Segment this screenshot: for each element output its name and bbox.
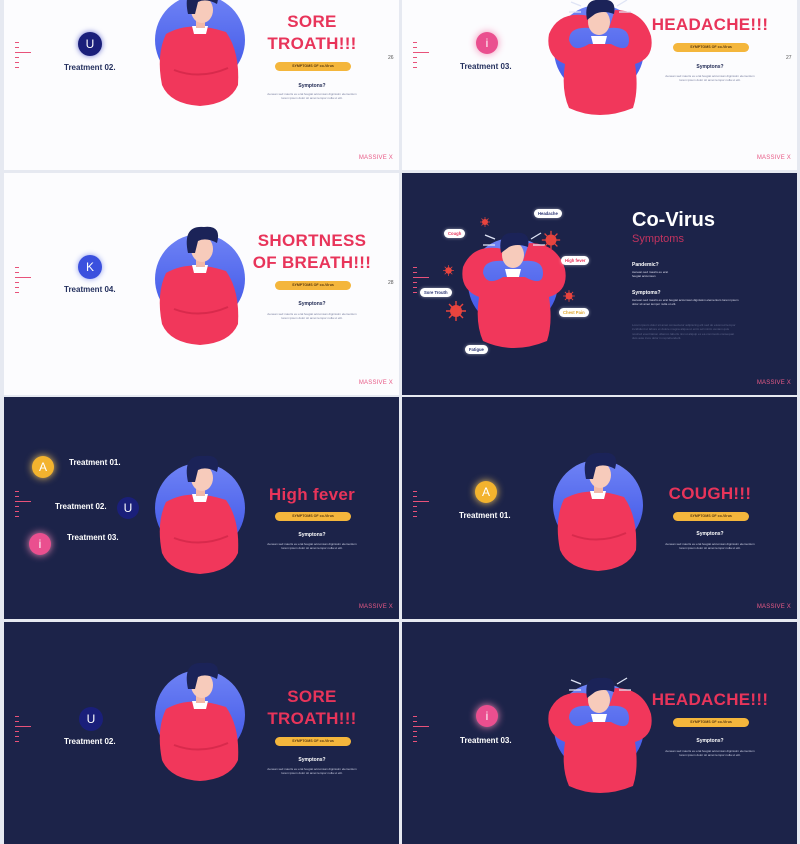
body text: Aenean sed mauris eu erat feugiat accumsan dignissim elementum lorem ipsum dolor sit amet tempor nulla ut elit. [267, 312, 357, 320]
slide: sore throat (light) [4, 0, 399, 170]
slide: headache (light) [402, 0, 797, 170]
label chest pain [559, 308, 589, 317]
nav [15, 42, 31, 68]
person illustration [548, 678, 652, 793]
label fatigue: Fatigue [469, 347, 484, 352]
person illustration [155, 663, 245, 781]
footer: MASSIVE X [757, 380, 791, 386]
treatment icon A: A [482, 485, 490, 499]
pill: SYMPTOMS OF co-Virus [690, 720, 732, 724]
title: HEADACHE!!! [652, 15, 768, 34]
footer: MASSIVE X [359, 155, 393, 161]
question: Symptons? [298, 83, 326, 89]
nav [413, 42, 429, 68]
treatment text: Treatment 03. [460, 736, 512, 745]
treatment text: Treatment 04. [64, 285, 116, 294]
pill [275, 737, 351, 746]
symptoms block: Aenean sed mauris eu erat feugiat accumsan dignissim elementum lorem ipsum dolor sit amet tempor nulla ut elit. [632, 298, 739, 306]
question: Symptons? [696, 531, 724, 537]
pill: SYMPTOMS OF co-Virus [292, 739, 334, 743]
slide: high fever (dark) [4, 397, 399, 619]
nav [15, 267, 31, 293]
title [267, 687, 357, 728]
subheading: Symptoms [632, 233, 684, 245]
nav [413, 716, 429, 742]
label fatigue [465, 345, 488, 354]
title: TROATH!!! [267, 709, 357, 728]
person illustration [462, 232, 566, 348]
question: Symptons? [696, 738, 724, 744]
symptoms block [632, 290, 739, 306]
treatment icon A: A [39, 460, 47, 474]
title [267, 12, 357, 53]
heading: Co-Virus [632, 209, 715, 231]
pill [673, 43, 749, 52]
person illustration [155, 0, 245, 106]
label cough [444, 229, 465, 238]
label high fever: High fever [565, 258, 585, 263]
footer: MASSIVE X [359, 604, 393, 610]
treatment icon U [79, 707, 103, 731]
viruses [443, 217, 575, 321]
treatment icon U: U [86, 37, 94, 51]
nav [413, 491, 429, 517]
label headache [534, 209, 562, 218]
footer: MASSIVE X [757, 604, 791, 610]
pill [275, 62, 351, 71]
pandemic block: Aenean sed mauris eu erat [632, 270, 668, 274]
body text: Aenean sed mauris eu erat feugiat accumsan dignissim elementum lorem ipsum dolor sit amet tempor nulla ut elit. [665, 74, 755, 82]
treatment text: Treatment 02. [64, 737, 116, 746]
treatment 03 text: Treatment 03. [67, 533, 119, 542]
pill [275, 281, 351, 290]
nav [15, 491, 31, 517]
label high fever [561, 256, 589, 265]
label cough: Cough [448, 231, 461, 236]
nav [413, 267, 429, 293]
question: Symptons? [298, 301, 326, 307]
treatment icon i [476, 705, 498, 727]
treatment icon A [475, 481, 497, 503]
pandemic block: feugiat accumsan [632, 274, 656, 278]
person illustration [548, 0, 652, 115]
footer: MASSIVE X [359, 380, 393, 386]
body text: Aenean sed mauris eu erat feugiat accumsan dignissim elementum lorem ipsum dolor sit amet tempor nulla ut elit. [267, 767, 357, 775]
person illustration [155, 226, 245, 345]
body text: Aenean sed mauris eu erat feugiat accumsan dignissim elementum lorem ipsum dolor sit amet tempor nulla ut elit. [267, 542, 357, 550]
treatment icon i: i [486, 709, 488, 723]
label headache: Headache [538, 211, 558, 216]
nav [15, 716, 31, 742]
slide: shortness of breath (light) [4, 173, 399, 395]
title: TROATH!!! [267, 34, 357, 53]
treatment 02 text: Treatment 02. [55, 502, 107, 511]
person illustration [553, 453, 643, 571]
treatment icon i [29, 533, 51, 555]
title: SORE [287, 687, 337, 706]
slide: sore throat (dark) [4, 622, 399, 844]
pandemic block [632, 262, 668, 278]
treatment text: Treatment 01. [459, 511, 511, 520]
treatment icon K: K [86, 260, 94, 274]
question: Symptons? [298, 757, 326, 763]
title: OF BREATH!!! [253, 253, 371, 272]
treatment icon U: U [124, 501, 132, 515]
treatment 01 text: Treatment 01. [69, 458, 121, 467]
symptoms block: Symptoms? [632, 290, 661, 296]
label chest pain: Chest Pain [563, 310, 585, 315]
treatment icon U [78, 32, 102, 56]
question: Symptons? [298, 532, 326, 538]
label sore trouth: Sore Trouth [424, 290, 448, 295]
pill [673, 512, 749, 521]
body text: Aenean sed mauris eu erat feugiat accumsan dignissim elementum lorem ipsum dolor sit amet tempor nulla ut elit. [665, 542, 755, 550]
question: Symptons? [696, 64, 724, 70]
pandemic block: Pandemic? [632, 262, 659, 268]
slide: cough (dark) [402, 397, 797, 619]
paragraph: Lorem ipsum dolor sit amet consectetur adipiscing elit sed do eiusmod tempor incididunt ut labore et dolore magna aliqua ut enim ad minim veniam quis nostrud exercitation ullamco laboris nisi ut aliquip ex ea commodo consequat duis aute irure dolor in reprehenderit. [632, 323, 736, 340]
pill [275, 512, 351, 521]
person illustration [155, 456, 245, 574]
pill: SYMPTOMS OF co-Virus [690, 514, 732, 518]
title [253, 231, 371, 272]
body text: Aenean sed mauris eu erat feugiat accumsan dignissim elementum lorem ipsum dolor sit amet tempor nulla ut elit. [665, 749, 755, 757]
treatment icon i [476, 32, 498, 54]
slide: headache (dark) [402, 622, 797, 844]
label sore trouth [420, 288, 452, 297]
pill: SYMPTOMS OF co-Virus [690, 45, 732, 49]
page number: 26 [388, 55, 394, 61]
pill: SYMPTOMS OF co-Virus [292, 514, 334, 518]
treatment text: Treatment 03. [460, 62, 512, 71]
title: HEADACHE!!! [652, 690, 768, 709]
body text: Aenean sed mauris eu erat feugiat accumsan dignissim elementum lorem ipsum dolor sit amet tempor nulla ut elit. [267, 92, 357, 100]
title: SHORTNESS [258, 231, 366, 250]
footer: MASSIVE X [757, 155, 791, 161]
treatment icon U [117, 497, 139, 519]
title: COUGH!!! [669, 484, 751, 503]
treatment icon i: i [39, 537, 41, 551]
pill [673, 718, 749, 727]
page number: 27 [786, 55, 792, 61]
treatment icon U: U [87, 712, 95, 726]
treatment text: Treatment 02. [64, 63, 116, 72]
pill: SYMPTOMS OF co-Virus [292, 64, 334, 68]
page number: 28 [388, 280, 394, 286]
pill: SYMPTOMS OF co-Virus [292, 283, 334, 287]
title: SORE [287, 12, 337, 31]
treatment icon K [78, 255, 102, 279]
title: High fever [269, 485, 355, 504]
slide: co-virus symptoms (dark) [402, 173, 797, 395]
treatment icon A [32, 456, 54, 478]
treatment icon i: i [486, 36, 488, 50]
